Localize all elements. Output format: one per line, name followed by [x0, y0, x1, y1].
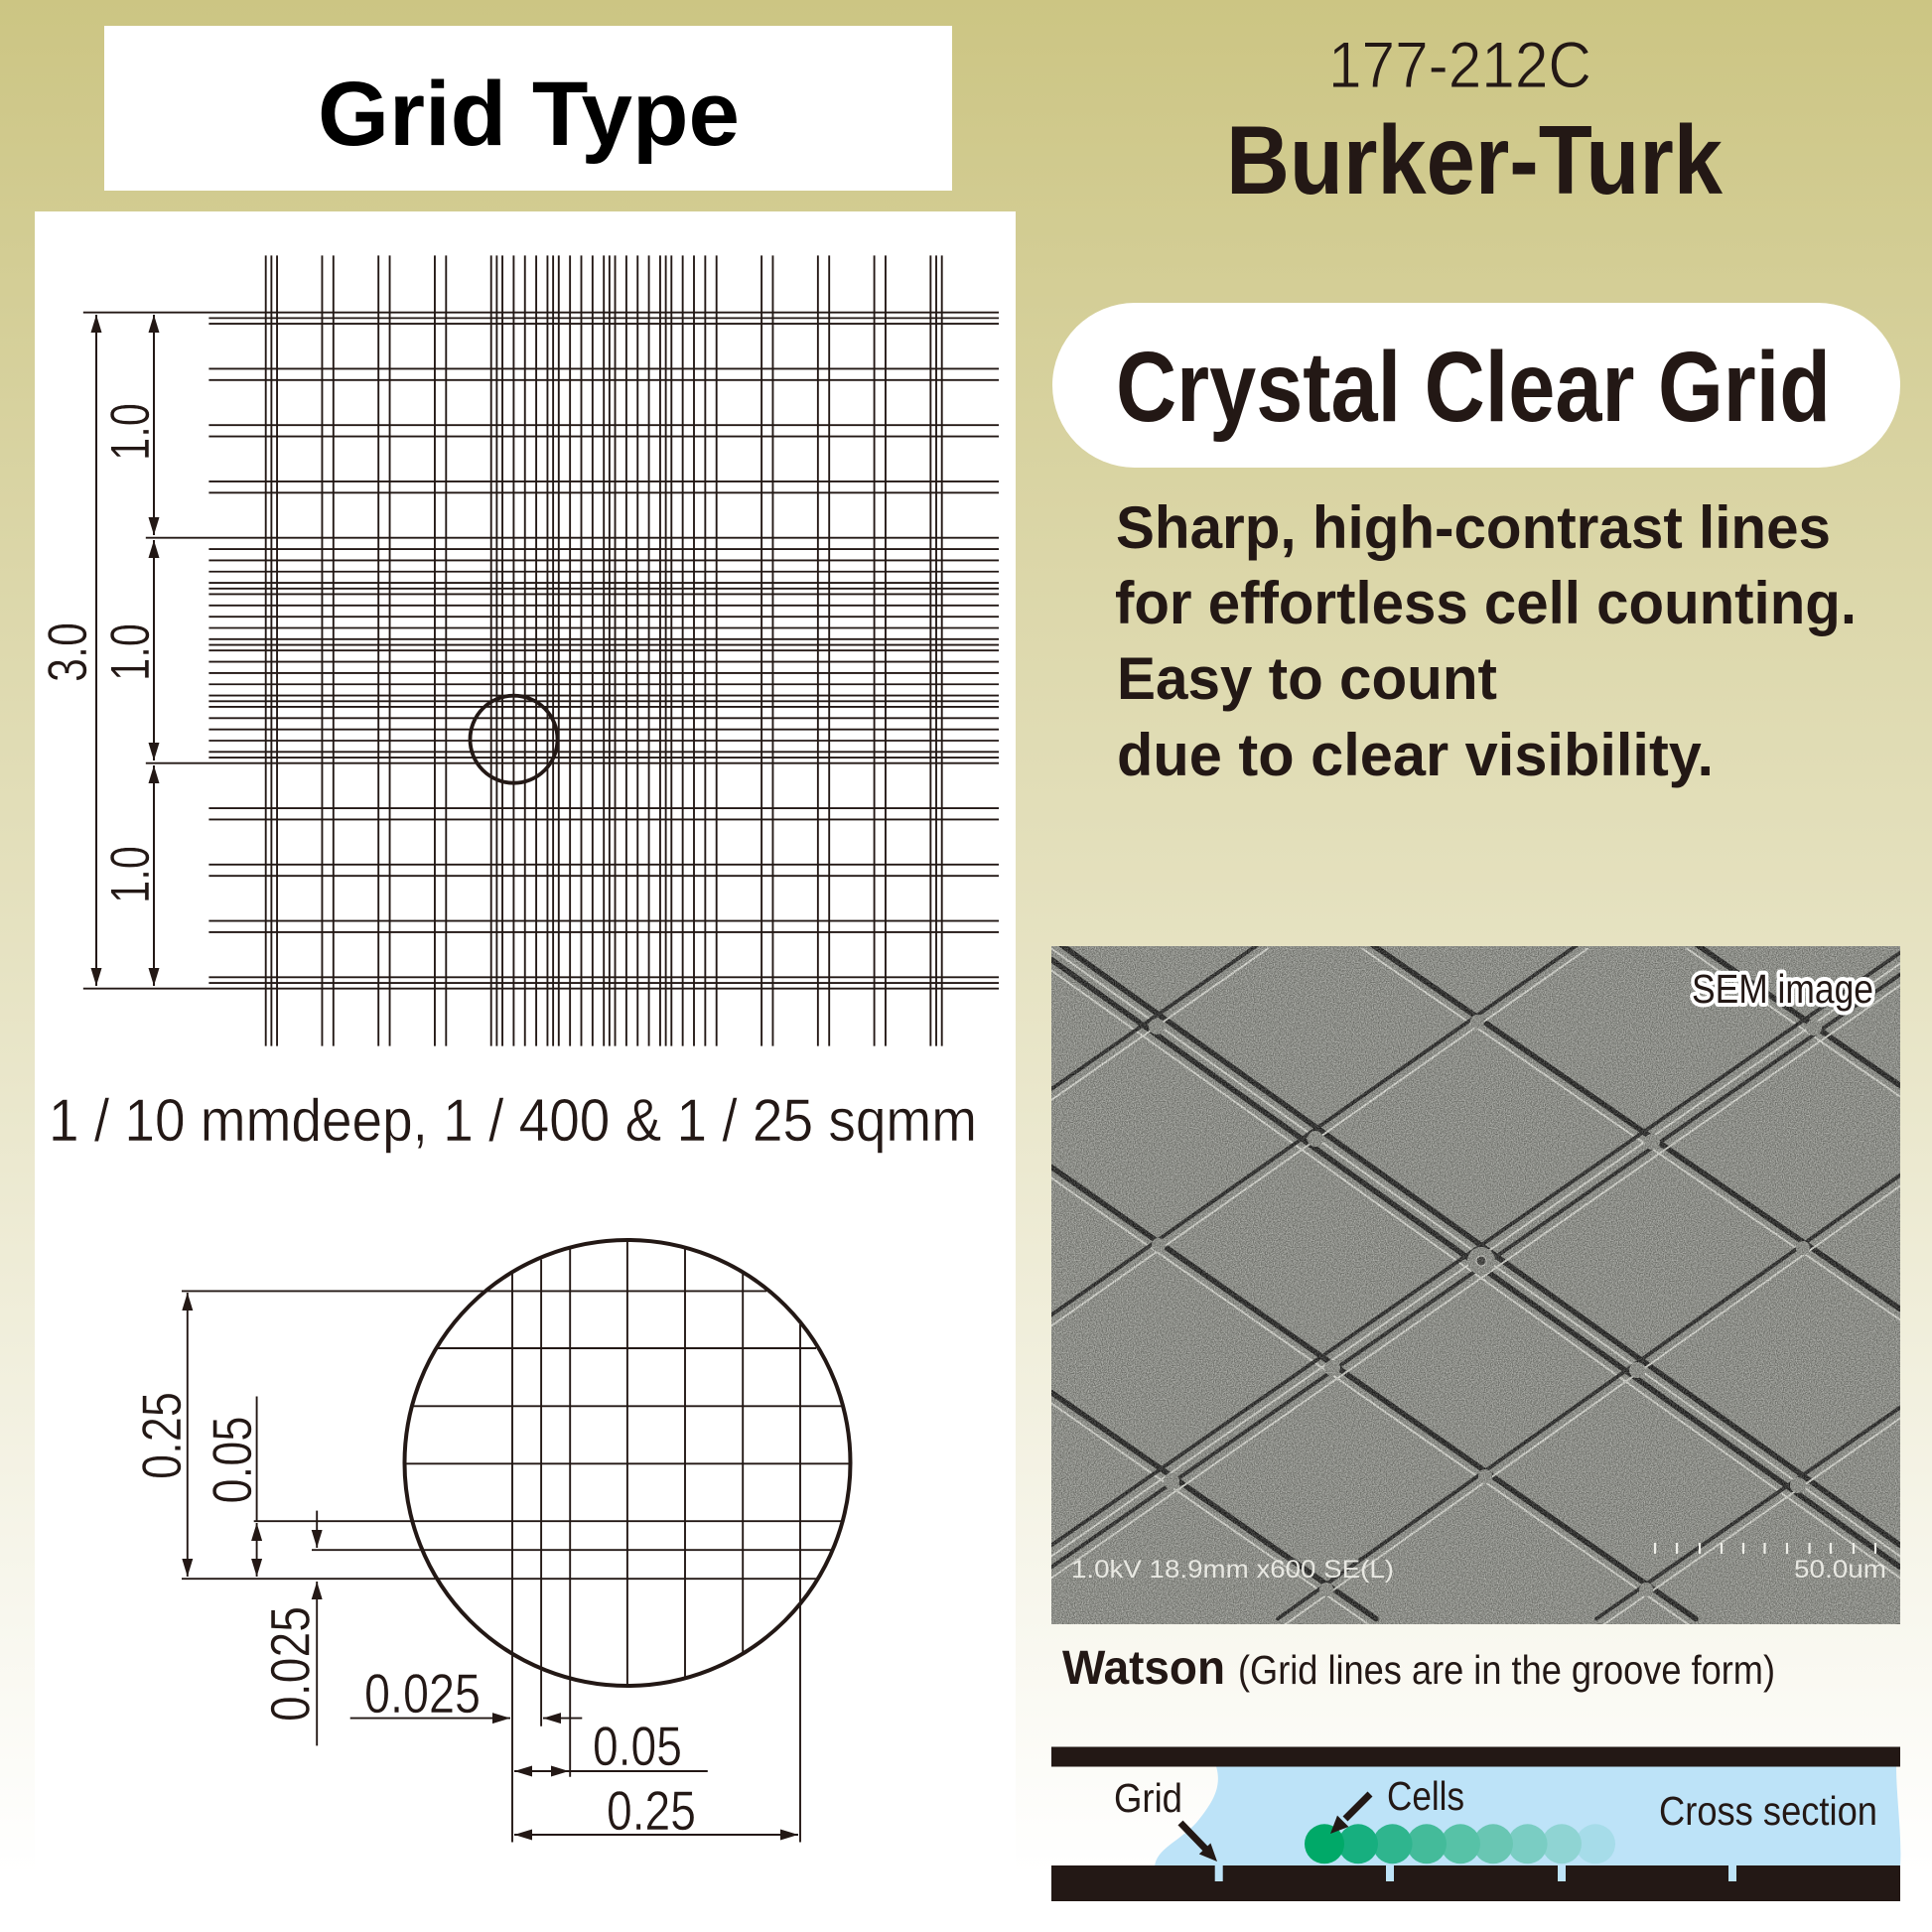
caption: Watson	[1062, 1642, 1775, 1695]
dimension: 0.025 vertical: 0.025	[258, 1606, 322, 1722]
grid specification text: 1 / 10 mmdeep, 1 / 400 & 1 / 25 sqmm	[49, 1087, 977, 1154]
product code: 177-212C	[1328, 28, 1591, 101]
description text: Sharp, high-contrast lines	[1116, 494, 1831, 561]
label: Cells: Cells	[1387, 1773, 1464, 1819]
panel: grid diagrams	[35, 211, 1016, 1932]
label: Cross section: Cross section	[1659, 1788, 1877, 1834]
grid grooves	[1215, 1865, 1736, 1881]
caption: Watson: (Grid lines are in the groove form)	[1238, 1647, 1775, 1693]
rising groove lines	[1051, 937, 1900, 1630]
dimension: 0.25 horizontal: 0.25	[607, 1779, 696, 1842]
cross section diagram	[1051, 1747, 1900, 1901]
falling groove lines	[1051, 937, 1900, 1630]
detail circle marker	[471, 696, 558, 783]
label: Grid: Grid	[1114, 1775, 1182, 1821]
arrow to cells	[1330, 1794, 1370, 1834]
bottom chamber bar	[1051, 1865, 1900, 1901]
caption: Watson: Watson	[1062, 1642, 1225, 1695]
dimension: 0.05 horizontal: 0.05	[593, 1715, 682, 1777]
description text: due to clear visibility.	[1117, 722, 1714, 788]
full grid diagram	[83, 255, 999, 1046]
SEM image panel	[1051, 937, 1900, 1630]
pill: Crystal Clear Grid	[1052, 303, 1900, 468]
SEM scale bar	[1655, 1543, 1886, 1584]
arrow to grid	[1180, 1823, 1217, 1862]
SEM label: SEM image	[1692, 966, 1873, 1012]
dimension: 0.25 vertical: 0.25	[130, 1392, 193, 1479]
heading box: Grid Type	[104, 26, 952, 191]
liquid layer	[1155, 1766, 1900, 1866]
SEM metadata: 1.0kV 18.9mm x600 SE(L)	[1071, 1556, 1394, 1584]
dimension: bottom 1.0: 1.0	[98, 846, 161, 903]
description text	[1115, 494, 1857, 788]
dimension: top 1.0: 1.0	[98, 403, 161, 461]
dimension: 0.05 vertical: 0.05	[201, 1416, 263, 1503]
enlarged circle diagram	[130, 1239, 850, 1843]
heading box: Grid Type: Grid Type	[318, 64, 740, 165]
dimension: middle 1.0: 1.0	[98, 623, 161, 681]
description text: Easy to count	[1117, 645, 1497, 712]
SEM scale bar: 50.0um	[1794, 1556, 1886, 1584]
dimension: 0.025 horizontal: 0.025	[364, 1662, 481, 1725]
description text: for effortless cell counting.	[1115, 570, 1857, 636]
top glass bar	[1051, 1747, 1900, 1767]
product name: Burker-Turk	[1226, 105, 1723, 214]
dimension: 3.0: 3.0	[36, 622, 98, 682]
cells	[1305, 1824, 1615, 1863]
